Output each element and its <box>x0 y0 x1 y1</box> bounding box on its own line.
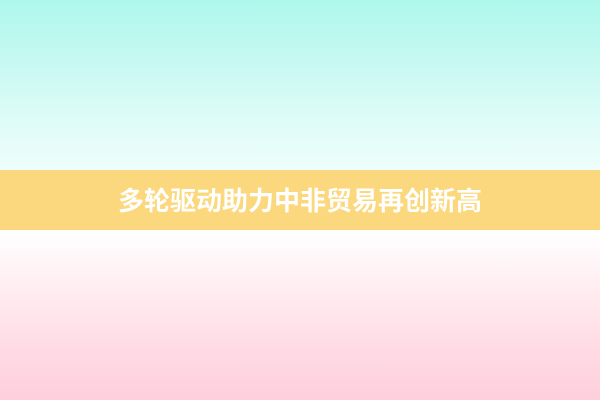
title band <box>0 170 600 230</box>
title: 多轮驱动助力中非贸易再创新高 <box>118 186 482 216</box>
